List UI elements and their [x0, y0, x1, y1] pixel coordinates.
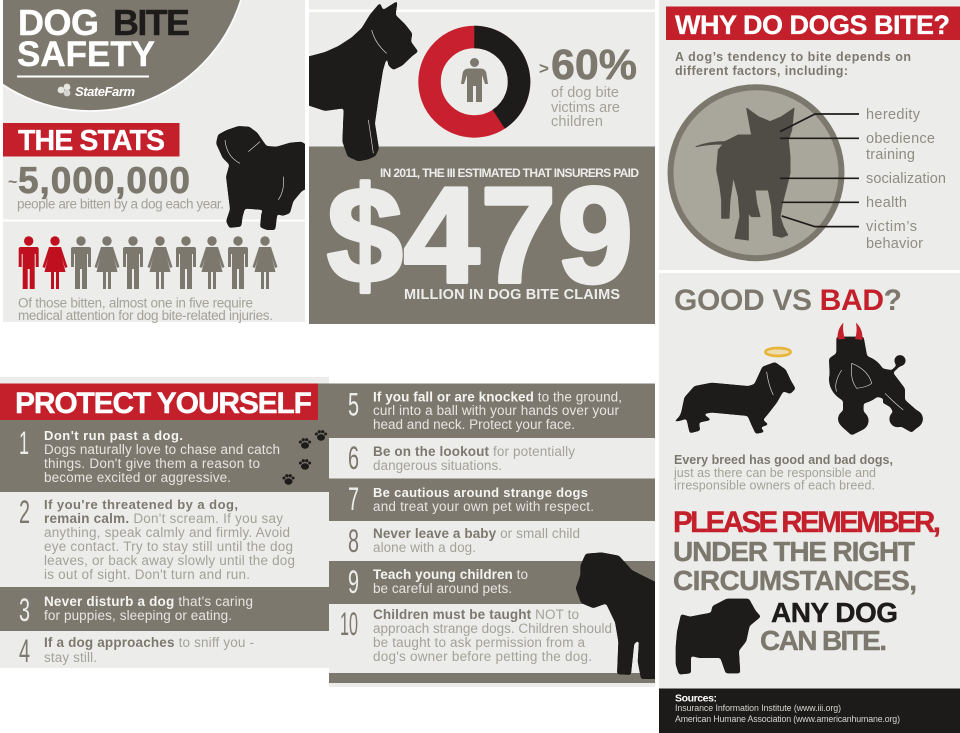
text: intro — [675, 50, 911, 78]
panel: sources: Sources: — [675, 692, 717, 704]
icon: paw prints — [282, 430, 327, 485]
icon: bull terrier silhouette — [696, 108, 794, 240]
tip 7: Be cautious around strange dogs — [373, 485, 588, 500]
tip 5: 5 — [348, 386, 359, 422]
stat: over 60 percent: 60% — [551, 41, 637, 89]
tip 3 — [19, 592, 253, 628]
text: factor labels: victim’s — [866, 219, 917, 235]
text: every breed: just as there can be responsible and — [673, 466, 876, 480]
panel: protect yourself tips 5 to 10 — [329, 384, 662, 687]
text: factor labels: heredity — [866, 107, 921, 123]
icon: poodle with horns — [829, 323, 923, 435]
tip 5: If you fall or are knocked to the ground, — [373, 390, 622, 404]
tip 2 — [19, 494, 295, 582]
tip 1: Don't run past a dog. — [44, 428, 183, 443]
tip 1: things. Don't give them a reason to — [44, 456, 260, 471]
text: every breed: Every breed has good and bad dogs, — [674, 453, 893, 467]
icon: schnauzer silhouette — [309, 2, 418, 161]
text: please remember: ANY DOG — [771, 597, 898, 628]
tip 10: Children must be taught NOT to — [373, 607, 579, 622]
tip 6 — [348, 440, 575, 476]
State Farm logo: StateFarm — [75, 84, 135, 99]
text: factor labels: training — [866, 147, 915, 163]
tip 10: 10 — [340, 606, 358, 642]
text: please remember: CIRCUMSTANCES, — [673, 565, 917, 596]
tip 1: Dogs naturally love to chase and catch — [44, 442, 280, 457]
text: factor labels: health — [866, 195, 907, 211]
tip 5: head and neck. Protect your face. — [373, 417, 575, 432]
stat: over 60 percent — [539, 41, 637, 130]
panel: sources: American Humane Association (www.americanhumane.org) — [675, 714, 900, 724]
tip 8: 8 — [348, 523, 359, 559]
icon: dachshund with halo — [672, 348, 796, 434]
tip 2: anything, speak calmly and firmly. Avoid — [44, 525, 290, 540]
panel: good vs bad and reminder — [659, 273, 960, 689]
panel: claims cost: IN 2011, THE III ESTIMATED THAT INSURERS PAID — [380, 166, 639, 180]
tip 5 — [348, 386, 622, 432]
panel: claims cost: MILLION IN DOG BITE CLAIMS — [404, 287, 620, 303]
title: SAFETY — [17, 35, 155, 74]
tip 6: dangerous situations. — [373, 458, 502, 473]
heading: good vs bad: GOOD VS BAD? — [674, 284, 902, 317]
icon: bulldog silhouette — [216, 126, 305, 230]
title: BITE — [113, 2, 190, 43]
text: factor labels: socialization — [866, 171, 946, 187]
text: intro: A dog’s tendency to bite depends on — [675, 50, 911, 64]
tip 2: leaves, or back away slowly until the dog — [44, 553, 295, 568]
panel: why do dogs bite — [659, 0, 960, 270]
stat: over 60 percent: of dog bite — [551, 85, 619, 101]
tip 4: 4 — [19, 633, 30, 669]
tip 2: 2 — [19, 494, 30, 530]
stat: over 60 percent: children — [551, 114, 603, 130]
icon: child — [461, 58, 488, 102]
icon: small terrier silhouette — [676, 599, 761, 675]
tip 8 — [348, 523, 580, 559]
stat: five million — [8, 160, 224, 212]
tip 7: 7 — [348, 481, 359, 517]
tip 3: Never disturb a dog that's caring — [44, 594, 253, 609]
tip 2: remain calm. Don't scream. If you say — [44, 511, 283, 526]
tip 4: If a dog approaches to sniff you - — [44, 635, 254, 650]
stat: five million: 5,000,000 — [18, 160, 190, 201]
tip 1: 1 — [19, 425, 29, 461]
panel: claims cost: $479 — [327, 159, 633, 311]
panel: dog bite safety and the stats — [0, 0, 310, 323]
panel: sources: Insurance Information Institute (www.iii.org) — [675, 703, 841, 713]
tip 8: alone with a dog. — [373, 540, 476, 555]
text: please remember — [673, 506, 941, 656]
tip 5: curl into a ball with your hands over your — [373, 403, 620, 418]
tip 9 — [348, 564, 528, 600]
panel: children statistic — [305, 0, 655, 324]
stat: over 60 percent: > — [539, 59, 549, 78]
text: one in five caption: medical attention for dog bite-related injuries. — [18, 308, 273, 323]
text: factor labels: behavior — [866, 236, 923, 252]
tip 10: be taught to ask permission from a — [373, 635, 585, 650]
tip 2: If you're threatened by a dog, — [44, 497, 238, 512]
tip 3: for puppies, sleeping or eating. — [44, 608, 232, 623]
tip 1: become excited or aggressive. — [44, 470, 231, 485]
tip 8: Never leave a baby or small child — [373, 526, 580, 541]
panel: protect yourself tips 1 to 4 — [0, 377, 329, 669]
text: intro: different factors, including: — [675, 64, 848, 78]
stat: five million: ~ — [8, 174, 17, 191]
tip 9: be careful around pets. — [373, 581, 512, 596]
tip 2: is out of sight. Don't turn and run. — [44, 567, 250, 582]
title: DOG — [18, 2, 99, 43]
heading: why do dogs bite: WHY DO DOGS BITE? — [675, 10, 950, 40]
text: one in five caption — [18, 296, 273, 323]
tip 10: dog's owner before petting the dog. — [373, 649, 592, 664]
tip 4: stay still. — [44, 650, 97, 665]
panel: sources — [659, 688, 960, 733]
title — [17, 2, 190, 78]
tip 3: 3 — [19, 592, 30, 628]
tip 4 — [19, 633, 254, 669]
text: factor labels: obedience — [866, 131, 935, 147]
tip 6: Be on the lookout for potentially — [373, 444, 575, 459]
text: please remember: CAN BITE. — [760, 625, 887, 656]
tip 10: approach strange dogs. Children should — [373, 621, 612, 636]
text: every breed — [673, 453, 893, 492]
factor lines — [780, 114, 859, 227]
tip 6: 6 — [348, 440, 359, 476]
chart: donut 60 percent — [430, 37, 519, 126]
text: factor labels — [866, 107, 946, 252]
tip 10 — [340, 606, 612, 664]
text: please remember: UNDER THE RIGHT — [673, 536, 915, 567]
tip 9: Teach young children to — [373, 567, 528, 582]
tip 7 — [348, 481, 594, 517]
title badge — [0, 0, 249, 112]
tip 9: 9 — [348, 564, 359, 600]
heading: the stats: THE STATS — [18, 125, 165, 157]
tip 2: eye contact. Try to stay still until the dog — [44, 539, 293, 554]
text: one in five caption: Of those bitten, almost one in five require — [18, 296, 253, 310]
text: every breed: irresponsible owners of each breed. — [674, 478, 875, 492]
stat: five million: people are bitten by a dog each year. — [17, 196, 224, 212]
tip 7: and treat your own pet with respect. — [373, 499, 594, 514]
chart: one in five people — [19, 236, 277, 289]
icon: terrier silhouette — [576, 552, 655, 679]
stat: over 60 percent: victims are — [551, 100, 620, 116]
tip 1 — [19, 425, 280, 485]
chart: dog factors circle — [670, 87, 946, 258]
heading: protect yourself: PROTECT YOURSELF — [15, 387, 312, 420]
text: please remember: PLEASE REMEMBER, — [673, 506, 941, 539]
